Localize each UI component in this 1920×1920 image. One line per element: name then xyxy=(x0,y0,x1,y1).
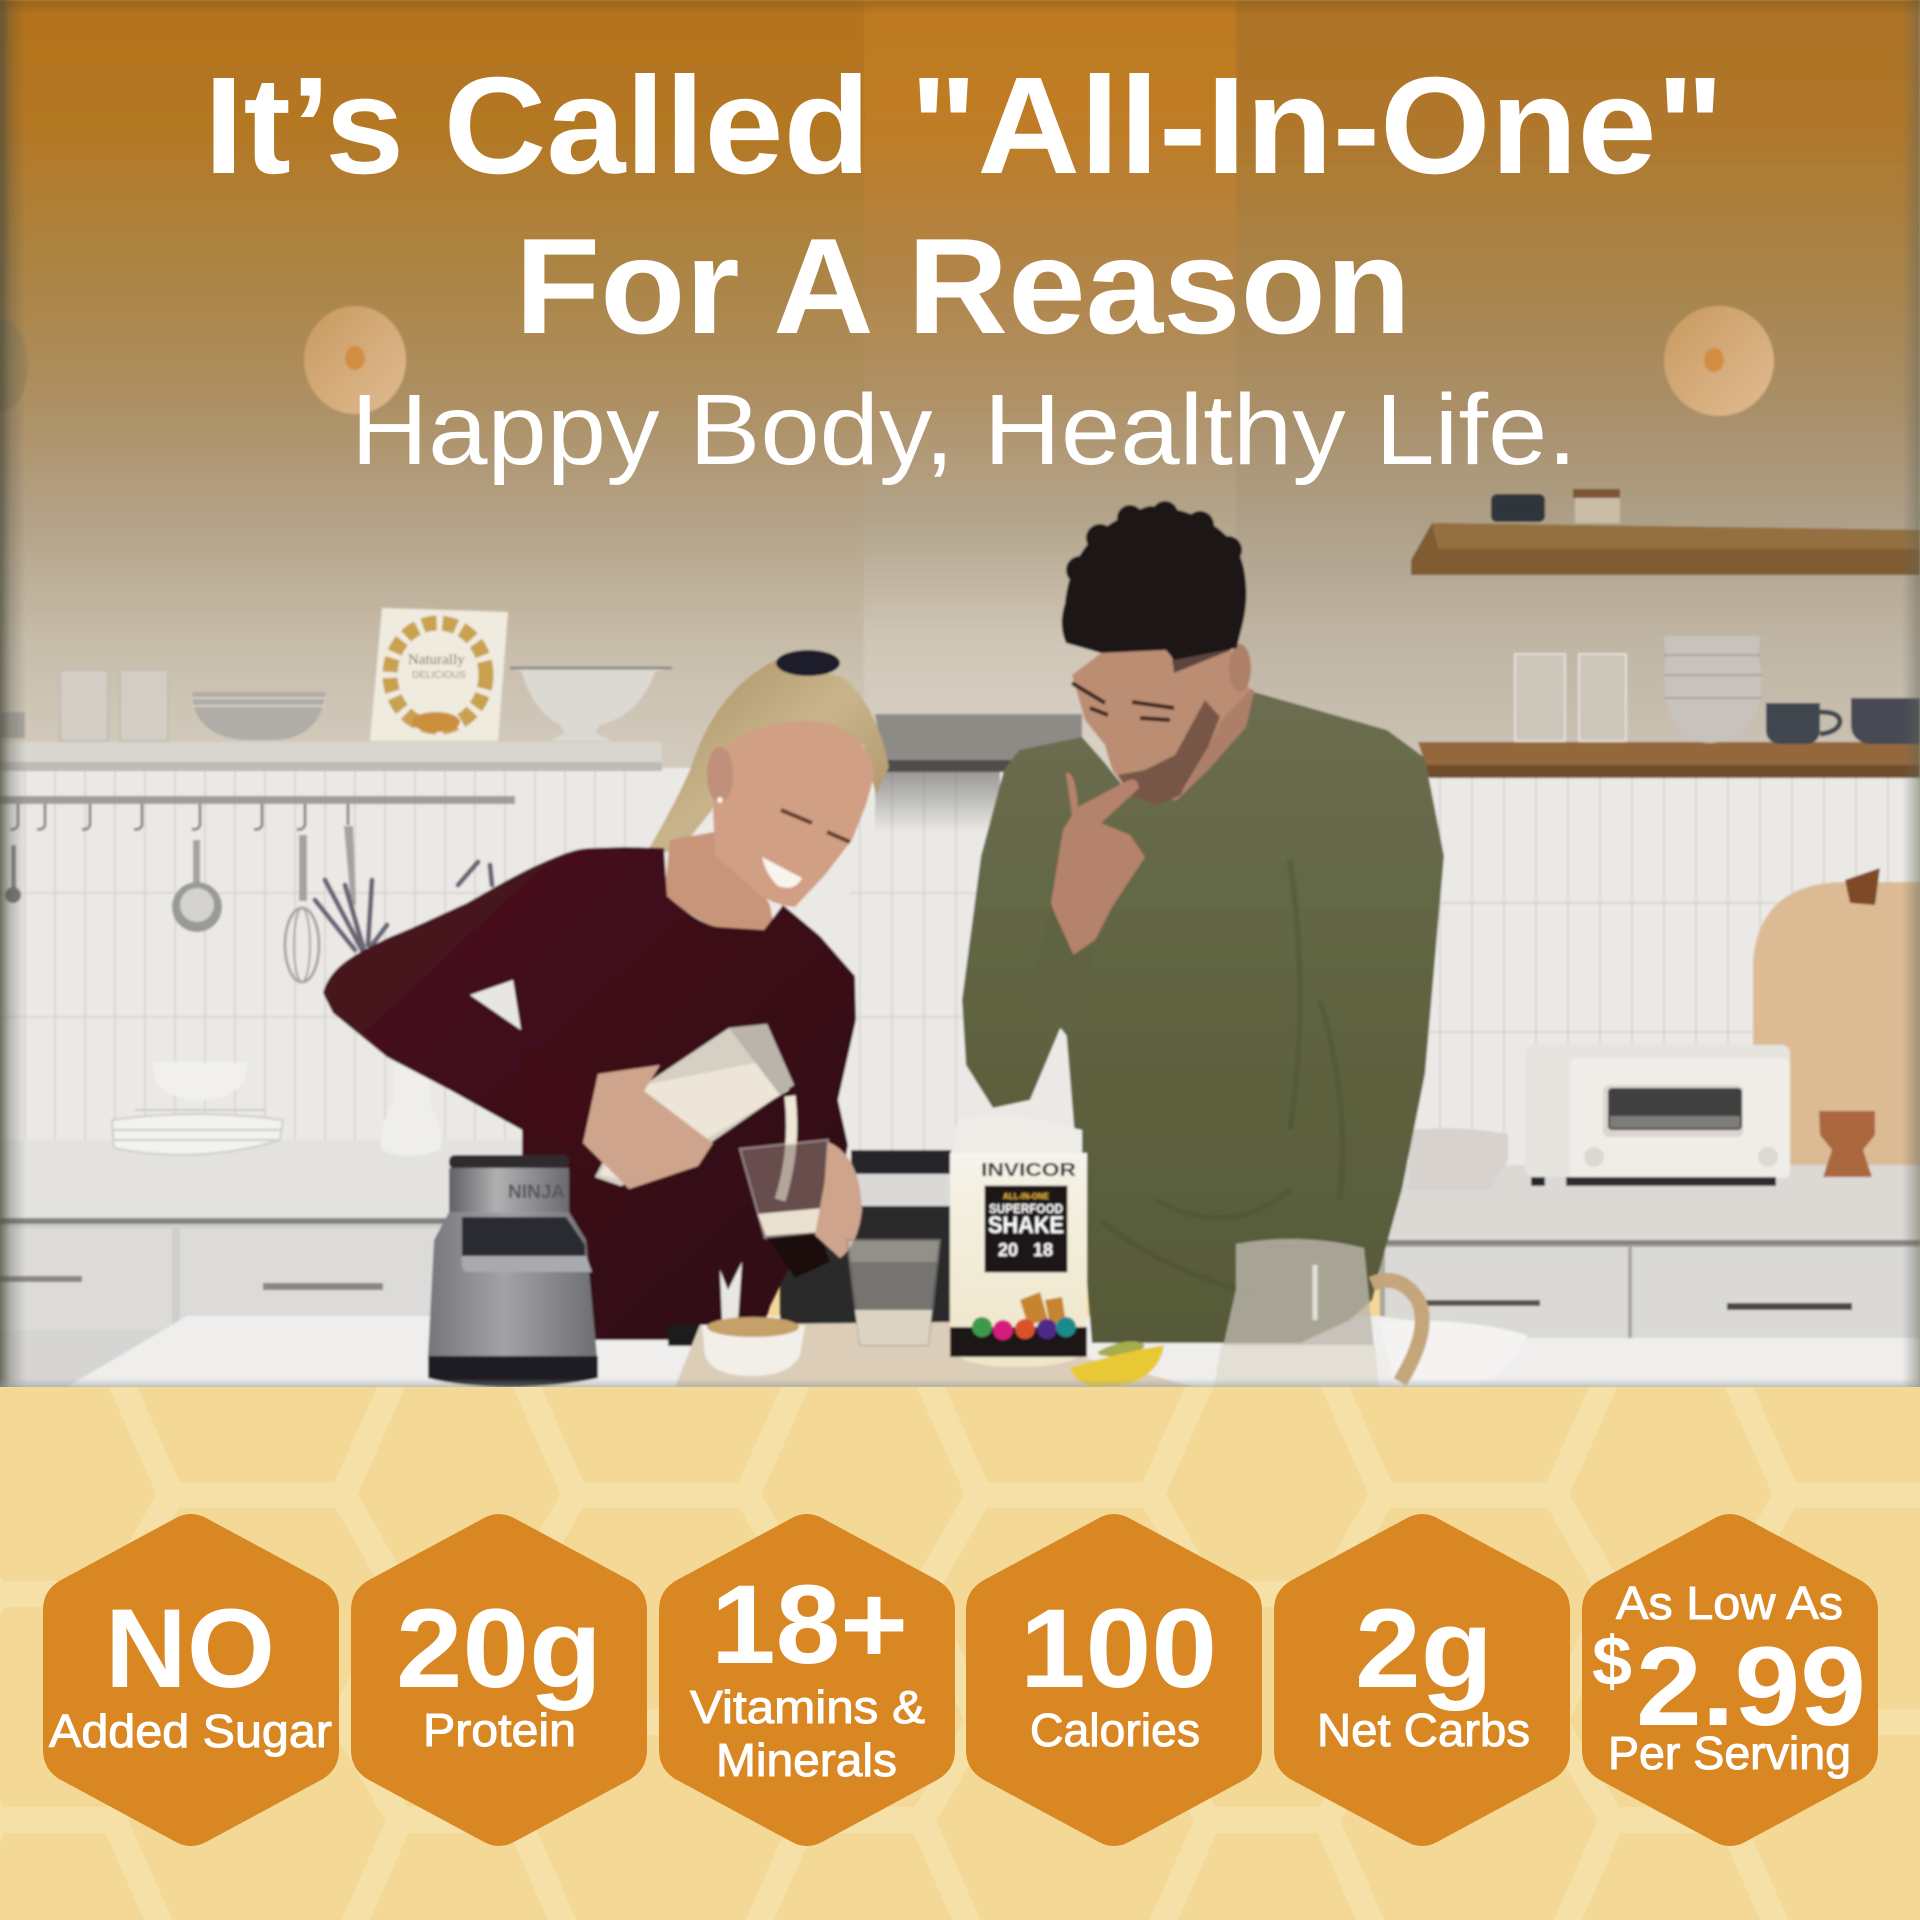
milk stream xyxy=(780,1096,792,1200)
eyes xyxy=(781,810,850,842)
ear xyxy=(1229,644,1251,692)
oven behind counter xyxy=(780,1150,952,1336)
badge: no added sugar: NO xyxy=(105,1586,275,1711)
glass in hand xyxy=(740,1140,830,1278)
badge: no added sugar xyxy=(43,1514,339,1846)
colored hex icons xyxy=(972,1317,1076,1340)
cutting board xyxy=(1753,882,1920,1165)
label text: SHAKE xyxy=(988,1212,1064,1239)
wrist cuff xyxy=(1030,905,1097,1040)
blender: NINJA xyxy=(508,1182,565,1203)
terracotta cup xyxy=(1819,1111,1875,1177)
badge: 18+ vitamins and minerals: Vitamins & xyxy=(690,1681,925,1733)
title: For A Reason xyxy=(515,210,1411,362)
label panel xyxy=(984,1185,1068,1273)
scrunchie xyxy=(776,650,840,676)
right shelves and crockery xyxy=(1411,489,1920,778)
lavender sprigs xyxy=(315,862,492,950)
badge: price per serving xyxy=(1582,1514,1878,1846)
label text: ALL-IN-ONE xyxy=(1003,1192,1050,1201)
badge: 18+ vitamins and minerals xyxy=(659,1514,955,1846)
neck xyxy=(1160,680,1254,810)
utensil rail xyxy=(0,796,515,982)
hand at mouth xyxy=(1051,773,1145,957)
photo edge vignette xyxy=(0,0,1920,1387)
holding hand xyxy=(815,1142,862,1258)
sweater xyxy=(323,847,856,1340)
torso and sleeves xyxy=(962,692,1444,1343)
badge: 20g protein: 20g xyxy=(396,1586,602,1711)
honeycomb panel xyxy=(0,1367,1920,1920)
cookbook: Naturally xyxy=(408,652,465,668)
badge: 2g net carbs: Net Carbs xyxy=(1317,1704,1530,1756)
toaster xyxy=(1525,1045,1790,1186)
hair xyxy=(645,660,889,855)
badge: price per serving: $ xyxy=(1592,1622,1632,1700)
badge: 18+ vitamins and minerals: Minerals xyxy=(716,1734,897,1786)
face xyxy=(1072,650,1250,805)
cookbook xyxy=(370,608,508,741)
photo: kitchen scene xyxy=(0,0,1920,1387)
right white bowl xyxy=(1379,1321,1527,1387)
smile xyxy=(762,857,802,888)
neck xyxy=(664,830,775,932)
hair fade xyxy=(1170,615,1231,673)
empty glass xyxy=(847,1240,940,1345)
range hood xyxy=(875,714,1082,832)
brand name: INVICOR xyxy=(981,1160,1076,1180)
woman xyxy=(323,650,889,1387)
badge: no added sugar: Added Sugar xyxy=(49,1705,332,1757)
title xyxy=(204,49,1724,362)
pouring jar xyxy=(595,1024,794,1186)
badge: 100 calories: Calories xyxy=(1030,1704,1200,1756)
label text: SUPERFOOD xyxy=(989,1201,1063,1216)
island counter xyxy=(67,1316,1920,1387)
subtitle: Happy Body, Healthy Life. xyxy=(351,374,1577,486)
label text xyxy=(988,1192,1064,1260)
cutting board with glass and bowl xyxy=(675,1240,1195,1387)
banana xyxy=(1070,1341,1164,1387)
label text: 20 xyxy=(998,1240,1018,1260)
badge: 18+ vitamins and minerals: 18+ xyxy=(711,1562,908,1687)
left shelf with dishes xyxy=(0,608,672,771)
badge: 2g net carbs xyxy=(1274,1514,1570,1846)
man xyxy=(962,501,1444,1343)
hair xyxy=(1062,501,1246,660)
stacked plates xyxy=(1408,1128,1508,1190)
shirt folds xyxy=(1100,860,1342,1295)
wall xyxy=(0,0,1920,800)
cookbook: DELICIOUS xyxy=(412,670,466,681)
glass pitcher with milk xyxy=(1214,1239,1422,1387)
pouring hand xyxy=(583,1065,713,1189)
product tub xyxy=(950,1117,1087,1367)
blender xyxy=(428,1155,598,1387)
badge: 2g net carbs: 2g xyxy=(1355,1586,1493,1711)
colander xyxy=(510,668,672,741)
wall lamps xyxy=(0,306,1774,416)
stubble beard xyxy=(1118,700,1220,805)
tile backsplash xyxy=(0,768,1920,1170)
badge: price per serving: 2.99 xyxy=(1636,1624,1866,1749)
white plates and vase on left counter xyxy=(112,1062,441,1156)
badge: 100 calories: 100 xyxy=(1020,1586,1217,1711)
left counter and cabinets xyxy=(0,1140,620,1387)
badge: price per serving: Per Serving xyxy=(1608,1727,1851,1779)
body xyxy=(950,1153,1087,1367)
sleeve cuff xyxy=(520,1045,595,1148)
badge: 20g protein: Protein xyxy=(423,1704,576,1756)
eyes and brows xyxy=(1072,683,1174,720)
badge: 20g protein xyxy=(351,1514,647,1846)
wicker handle xyxy=(1372,1280,1422,1382)
face xyxy=(711,721,875,907)
blender blade base xyxy=(668,1262,742,1346)
label text: 18 xyxy=(1033,1240,1053,1260)
badge: 100 calories xyxy=(966,1514,1262,1846)
caramel pieces xyxy=(1020,1292,1066,1325)
lid xyxy=(955,1117,1082,1153)
ear with stud xyxy=(707,747,733,803)
right counter, cabinets, toaster xyxy=(1380,868,1920,1340)
arm gap showing tile xyxy=(470,980,521,1030)
title: It’s Called "All-In-One" xyxy=(204,49,1724,203)
badge: price per serving: As Low As xyxy=(1616,1577,1843,1629)
peanut butter bowl xyxy=(702,1317,805,1376)
